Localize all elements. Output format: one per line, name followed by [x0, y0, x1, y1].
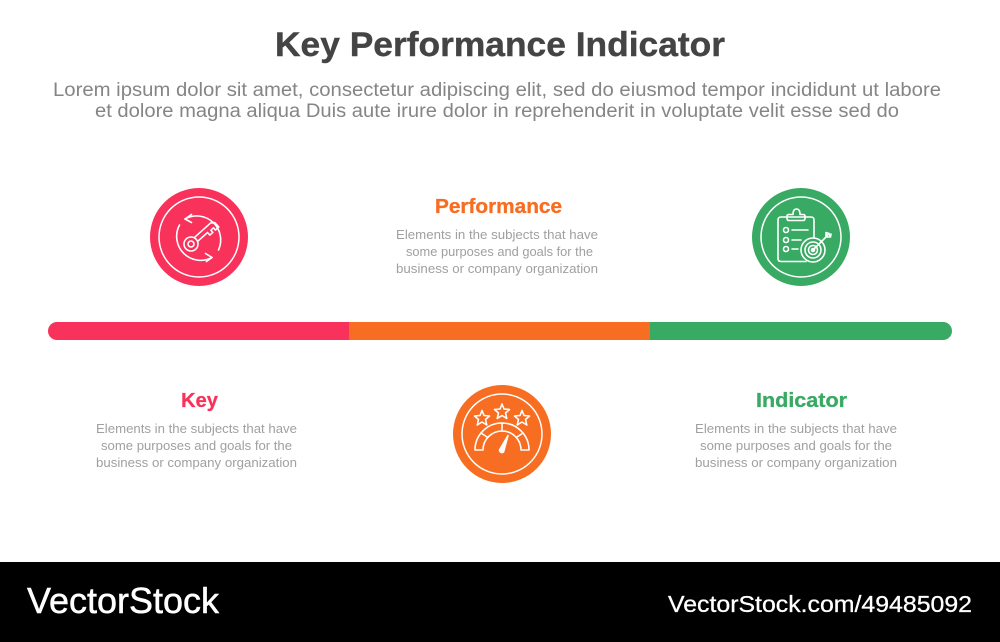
text block: Key description: business or company organization: [96, 456, 297, 470]
icon: gauge with stars: [453, 385, 551, 483]
timeline bar: [48, 322, 952, 340]
footer image reference: VectorStock.com/49485092: [668, 591, 972, 617]
footer band: [0, 562, 1000, 642]
icon: key in circular arrows: [150, 188, 248, 286]
text block: Performance description: business or company organization: [396, 262, 598, 276]
text block: Indicator description: [695, 422, 897, 470]
text block: Key description: Elements in the subjects that have: [96, 422, 297, 436]
icon: clipboard checklist with target: [752, 188, 850, 286]
text block: Indicator description: business or company organization: [695, 456, 897, 470]
title: Key Performance Indicator: [275, 26, 725, 64]
subtitle text block: [53, 80, 941, 122]
heading: Performance: Performance: [435, 196, 562, 218]
text block: Indicator description: Elements in the subjects that have: [695, 422, 897, 436]
heading: Indicator: Indicator: [756, 390, 847, 412]
subtitle text block: Lorem ipsum dolor sit amet, consectetur adipiscing elit, sed do eiusmod tempor incididunt ut labore: [53, 80, 941, 101]
text block: Performance description: some purposes and goals for the: [406, 245, 593, 259]
subtitle text block: et dolore magna aliqua Duis aute irure dolor in reprehenderit in voluptate velit esse sed do: [95, 101, 899, 122]
text block: Performance description: Elements in the subjects that have: [396, 228, 598, 242]
footer logo wordmark: VectorStock: [27, 580, 220, 621]
heading: Key: Key: [181, 390, 219, 412]
text block: Performance description: [396, 228, 598, 276]
text block: Indicator description: some purposes and goals for the: [700, 439, 892, 453]
text block: Key description: some purposes and goals for the: [101, 439, 292, 453]
text block: Key description: [96, 422, 297, 470]
